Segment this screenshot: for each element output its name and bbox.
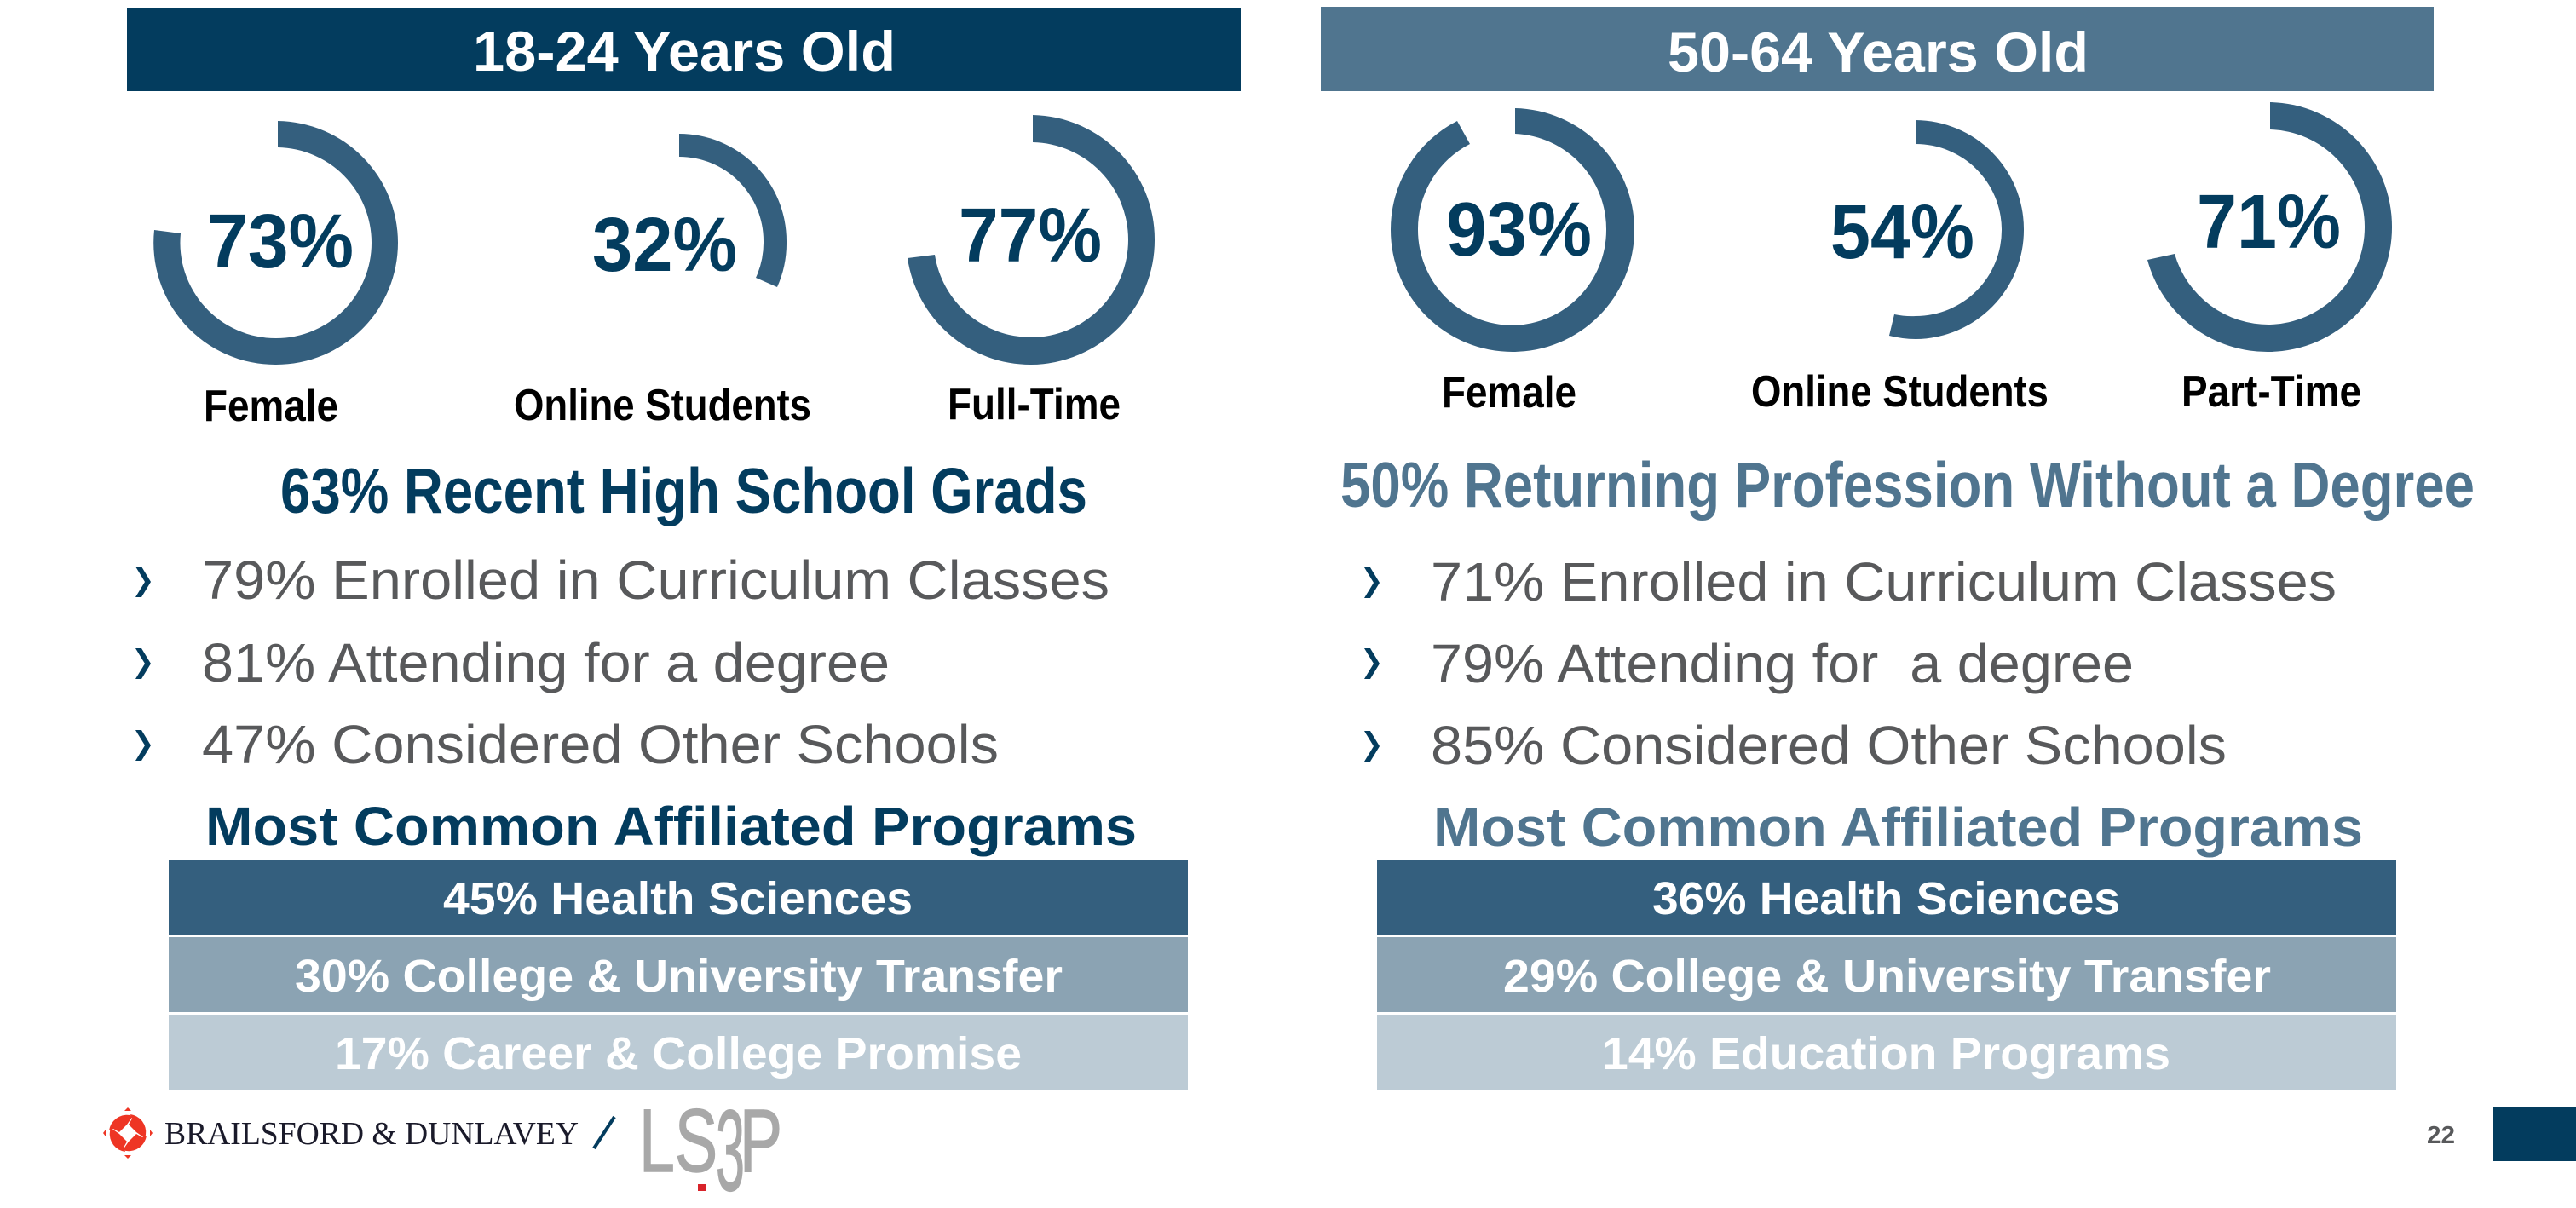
heading: most common affiliated programs: Most Common Affiliated Programs (1433, 797, 2363, 858)
bullet list: 18-24 statistics: 81% Attending for a degree (202, 632, 890, 693)
panel: 18-24 years old (127, 8, 1241, 1090)
program bars: 18-24: 45% Health Sciences (443, 873, 913, 924)
donut: 32% online students: 32% (592, 203, 737, 288)
icon: Brailsford & Dunlavey pinwheel (103, 1107, 153, 1159)
donut: 32% online students: Online Students (514, 381, 811, 430)
donut: 71% part-time: 71% (2197, 180, 2341, 265)
donut: 93% female: 93% (1446, 187, 1592, 273)
bullet list: 50-64 statistics: 79% Attending for a degree (1431, 633, 2134, 694)
logo text: Brailsford & Dunlavey: BRAILSFORD & DUNLAVEY (164, 1116, 579, 1152)
donut: 73% female (153, 121, 398, 431)
program bars: 18-24: 30% College & University Transfer (295, 951, 1063, 1002)
donut: 73% female: Female (204, 382, 338, 431)
donut: 73% female: 73% (207, 199, 354, 285)
header bar: 18-24 Years Old (127, 8, 1241, 91)
bullet list: 50-64 statistics (1364, 551, 2337, 776)
page number: 22 (2427, 1122, 2455, 1149)
bullet list: 50-64 statistics: 85% Considered Other Schools (1431, 715, 2227, 776)
panel: 50-64 years old (1321, 7, 2475, 1090)
footer logos (103, 1086, 782, 1208)
donut: 93% female (1391, 108, 1634, 417)
donut: 54% online students: 54% (1830, 190, 1974, 275)
bullet list: 18-24 statistics: 79% Enrolled in Curriculum Classes (202, 549, 1109, 611)
heading: most common affiliated programs: Most Common Affiliated Programs (205, 796, 1137, 857)
bullet list: 50-64 statistics: 71% Enrolled in Curriculum Classes (1431, 551, 2337, 613)
donut: 71% part-time (2147, 102, 2392, 417)
logo divider slash (594, 1117, 614, 1148)
logo: LS3P: P (740, 1091, 782, 1191)
donut: 32% online students (514, 134, 811, 430)
donut: 93% female: Female (1442, 368, 1576, 417)
header bar: 18-24 Years Old: 18-24 Years Old (473, 20, 896, 83)
donut: 71% part-time: Part-Time (2181, 367, 2361, 417)
bullet list: 18-24 statistics (135, 549, 1109, 775)
donut: 54% online students: Online Students (1751, 367, 2049, 417)
donut: 77% full-time: Full-Time (948, 380, 1121, 429)
program bars: 50-64: 29% College & University Transfer (1503, 951, 2271, 1002)
header bar: 50-64 Years Old (1321, 7, 2434, 91)
bullet list: 18-24 statistics: 47% Considered Other Schools (202, 714, 999, 775)
program bars: 50-64 (1377, 860, 2396, 1090)
header bar: 50-64 Years Old: 50-64 Years Old (1668, 20, 2089, 83)
donut: 77% full-time (908, 115, 1155, 429)
program bars: 18-24 (169, 860, 1188, 1090)
logo: LS3P (639, 1086, 782, 1208)
program bars: 18-24: 17% Career & College Promise (335, 1028, 1022, 1079)
program bars: 50-64: 14% Education Programs (1602, 1028, 2170, 1079)
donut: 54% online students (1751, 120, 2049, 417)
footer accent block (2493, 1107, 2576, 1161)
program bars: 50-64: 36% Health Sciences (1652, 873, 2120, 924)
subheading: recent high school grads: 63% Recent High School Grads (280, 455, 1087, 526)
logo: LS3P: LS (639, 1091, 717, 1191)
donut: 77% full-time: 77% (959, 193, 1102, 279)
